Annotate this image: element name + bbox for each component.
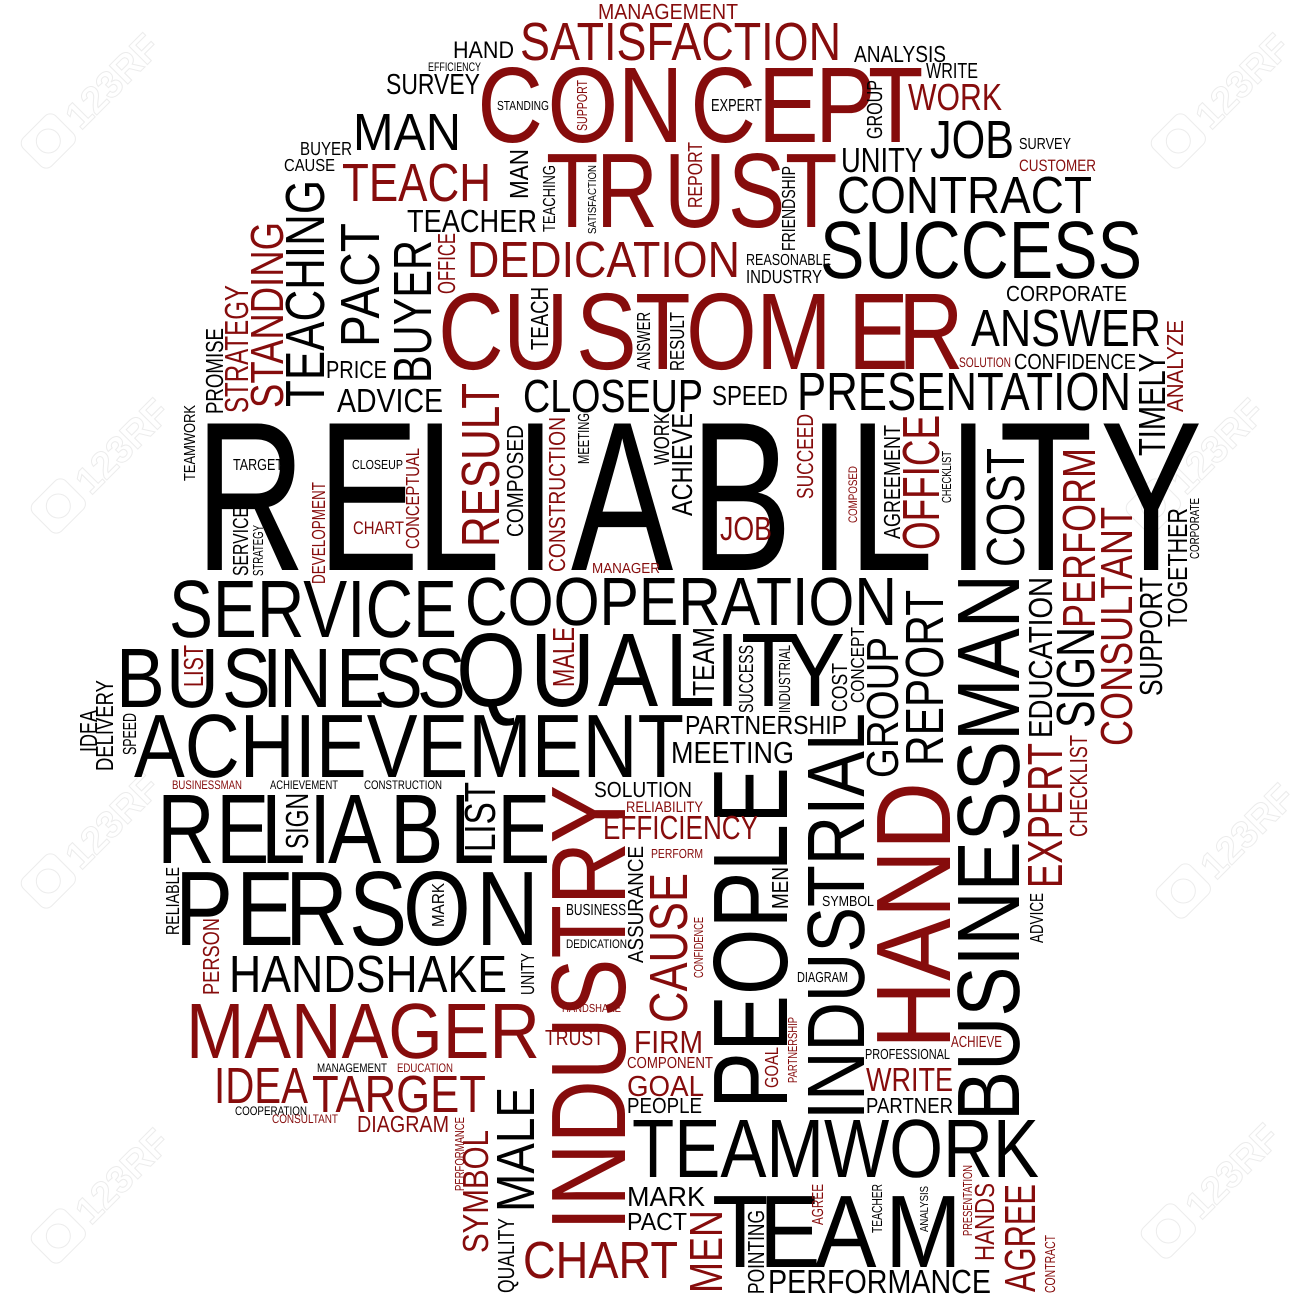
- word: ACHIEVEMENT: ACHIEVEMENT: [134, 697, 684, 797]
- word: PROMISE vertical: PROMISE: [202, 328, 229, 414]
- word: TOGETHER vertical: TOGETHER: [1162, 508, 1193, 627]
- word: INDUSTRY vertical: INDUSTRY: [530, 785, 648, 1231]
- word: EDUCATION vertical: EDUCATION: [1023, 577, 1060, 738]
- word: CONFIDENCE: CONFIDENCE: [1014, 349, 1136, 374]
- watermarks: 123RF: [58, 26, 169, 137]
- word: RELIABLE vertical small: RELIABLE: [163, 867, 184, 935]
- word: WORK: WORK: [908, 77, 1002, 119]
- word: TEAMWORK: TEAMWORK: [632, 1102, 1039, 1195]
- word: SUPPORT vertical: SUPPORT: [1133, 577, 1169, 696]
- word: MARK vertical: MARK: [428, 883, 448, 927]
- word: UNITY vertical: UNITY: [518, 953, 539, 995]
- word: ANALYSIS: ANALYSIS: [854, 41, 946, 67]
- word: PARTNERSHIP vertical small: PARTNERSHIP: [785, 1017, 800, 1083]
- word: PERSON vertical red: PERSON: [198, 918, 224, 995]
- word: PERFORM small: PERFORM: [651, 846, 703, 861]
- word: SYMBOL vertical: SYMBOL: [455, 1130, 496, 1253]
- word: IDEA: IDEA: [214, 1057, 308, 1114]
- word: SERVICE vertical small: SERVICE: [228, 507, 253, 576]
- word: OFFICE vertical small: OFFICE: [434, 233, 461, 294]
- watermarks: 123RF: [1193, 776, 1300, 887]
- word: IDEA vertical: IDEA: [76, 710, 103, 752]
- word: CLOSEUP small: CLOSEUP: [352, 457, 403, 472]
- word: REPORT vertical: REPORT: [895, 590, 955, 766]
- word: EDUCATION small: EDUCATION: [397, 1061, 453, 1075]
- word: STRATEGY vertical: STRATEGY: [219, 285, 256, 413]
- word: TEACH vertical: TEACH: [527, 287, 554, 350]
- word: MEN vertical small: MEN: [767, 867, 793, 909]
- word: EFFICIENCY: EFFICIENCY: [603, 810, 758, 847]
- word: MARK: MARK: [627, 1181, 706, 1212]
- word: WRITE: WRITE: [926, 58, 978, 83]
- word: SYMBOL small: SYMBOL: [822, 894, 874, 910]
- word: INDUSTRIAL vertical: INDUSTRIAL: [791, 713, 882, 1120]
- word: CONCEPT: CONCEPT: [477, 45, 923, 165]
- word: CLOSEUP: CLOSEUP: [523, 370, 703, 422]
- word: ADVICE: ADVICE: [337, 383, 443, 420]
- word: BUSINESSMAN vertical: BUSINESSMAN: [939, 574, 1038, 1121]
- word: SUPPORT vertical: SUPPORT: [575, 80, 591, 131]
- word: UNITY: UNITY: [841, 141, 923, 180]
- word: HANDS vertical: HANDS: [969, 1183, 1000, 1261]
- word: RESULT vertical small: RESULT: [667, 312, 689, 371]
- word: TARGET small: TARGET: [233, 457, 283, 474]
- word: PARTNERSHIP: PARTNERSHIP: [685, 710, 847, 740]
- word: CONSULTANT vertical: CONSULTANT: [1091, 507, 1142, 746]
- word: EFFICIENCY: EFFICIENCY: [428, 60, 481, 74]
- word: CAUSE: CAUSE: [284, 155, 335, 175]
- word: COMPONENT: COMPONENT: [627, 1055, 713, 1072]
- word: MEETING vertical: MEETING: [576, 413, 593, 464]
- word: BUSINESS small: BUSINESS: [566, 902, 626, 919]
- word: GOAL: GOAL: [627, 1071, 704, 1103]
- word: TIMELY vertical: TIMELY: [1132, 353, 1174, 456]
- word: AGREE vertical: AGREE: [997, 1184, 1045, 1292]
- word: SURVEY: SURVEY: [386, 69, 480, 101]
- word: TRUST small: TRUST: [545, 1025, 604, 1050]
- word: GOAL vertical small: GOAL: [762, 1047, 783, 1088]
- word: HANDSHAKE small: HANDSHAKE: [562, 1002, 621, 1015]
- word: DEDICATION: DEDICATION: [467, 231, 740, 288]
- watermarks: 123RF: [58, 766, 169, 877]
- word: DEDICATION small: DEDICATION: [566, 937, 627, 951]
- word: CORPORATE vertical small: CORPORATE: [1187, 498, 1202, 559]
- word: MEN vertical: MEN: [680, 1210, 732, 1293]
- word: CONSULTANT small: CONSULTANT: [272, 1112, 338, 1126]
- word: SOLUTION small: SOLUTION: [959, 355, 1011, 370]
- word: MAN: MAN: [353, 104, 461, 162]
- word: COST vertical small: COST: [827, 663, 852, 712]
- word: COST vertical: COST: [976, 448, 1036, 567]
- word: CONTRACT small vertical: CONTRACT: [1043, 1235, 1059, 1293]
- word: INDUSTRIAL vertical small: INDUSTRIAL: [777, 645, 794, 713]
- word: PERFORMANCE vertical small: PERFORMANCE: [452, 1117, 467, 1191]
- word: SUCCESS vertical small: SUCCESS: [736, 645, 758, 713]
- word: QUALITY vertical: QUALITY: [493, 1218, 519, 1293]
- word: CONSTRUCTION small: CONSTRUCTION: [364, 778, 442, 792]
- word: SATISFACTION vertical small: SATISFACTION: [586, 165, 599, 234]
- word: SIGN vertical: SIGN: [1046, 627, 1106, 728]
- word: CONFIDENCE vertical small: CONFIDENCE: [691, 917, 706, 978]
- word: CONSTRUCTION vertical: CONSTRUCTION: [544, 417, 570, 572]
- word: TEACHER: TEACHER: [407, 203, 537, 239]
- word: QUALITY: QUALITY: [456, 612, 845, 729]
- word: REASONABLE: REASONABLE: [746, 252, 831, 269]
- word: COOPERATION small: COOPERATION: [235, 1104, 307, 1118]
- word: EXPERT: EXPERT: [711, 95, 762, 115]
- word: SUCCEED vertical: SUCCEED: [792, 414, 818, 499]
- word: HAND vertical: HAND: [855, 782, 973, 1049]
- word: ACHIEVEMENT small: ACHIEVEMENT: [270, 778, 338, 792]
- word: DIAGRAM: DIAGRAM: [357, 1111, 449, 1137]
- word: TEAMWORK vertical small: TEAMWORK: [182, 405, 199, 481]
- word: ADVICE vertical small: ADVICE: [1027, 893, 1048, 943]
- word: GROUP vertical: GROUP: [862, 80, 887, 139]
- word: PACT vertical: PACT: [329, 223, 391, 347]
- word: TEACHER small vertical: TEACHER: [870, 1184, 886, 1233]
- word: SURVEY small: SURVEY: [1019, 136, 1071, 153]
- word: DELIVERY vertical: DELIVERY: [92, 680, 119, 771]
- word: DIAGRAM small: DIAGRAM: [797, 970, 848, 986]
- word: CORPORATE: CORPORATE: [1006, 281, 1127, 306]
- word: DEVELOPMENT vertical: DEVELOPMENT: [309, 482, 330, 584]
- word: HANDSHAKE: HANDSHAKE: [229, 946, 507, 1004]
- word: MALE vertical: MALE: [486, 1087, 546, 1212]
- word: CHECKLIST vertical small: CHECKLIST: [939, 451, 954, 503]
- word: POINTING vertical: POINTING: [743, 1210, 769, 1294]
- watermarks: 123RF: [68, 1121, 179, 1232]
- word: MANAGEMENT small: MANAGEMENT: [317, 1061, 387, 1075]
- word: PROFESSIONAL: PROFESSIONAL: [865, 1047, 950, 1063]
- word: TEACH: TEACH: [342, 153, 491, 213]
- word: MEETING: MEETING: [671, 736, 794, 770]
- word: TRUST: TRUST: [546, 132, 837, 250]
- word: ASSURANCE vertical: ASSURANCE: [623, 846, 648, 963]
- word: TEACHING small vertical: TEACHING: [539, 165, 559, 232]
- word: EXPERT vertical: EXPERT: [1018, 743, 1073, 888]
- word: INDUSTRY small: INDUSTRY: [746, 267, 822, 288]
- word: BUYER vertical: BUYER: [383, 240, 443, 383]
- word: PARTNER: PARTNER: [866, 1093, 953, 1118]
- word: MANAGER: MANAGER: [186, 987, 540, 1075]
- word: SPEED vertical: SPEED: [120, 713, 141, 755]
- word: ANSWER: ANSWER: [971, 300, 1161, 358]
- word: COMPOSED vertical small: COMPOSED: [846, 466, 860, 523]
- watermarks: 123RF: [1178, 1116, 1289, 1227]
- word: TARGET: TARGET: [312, 1066, 486, 1124]
- word: COOPERATION: COOPERATION: [465, 564, 897, 640]
- word: MANAGER small: MANAGER: [592, 561, 660, 577]
- word: BUSINESS: BUSINESS: [116, 631, 466, 725]
- word: TEAM: TEAM: [712, 1174, 962, 1289]
- word: WRITE: WRITE: [866, 1062, 953, 1099]
- word: JOB small: JOB: [720, 511, 772, 548]
- word: BUYER: BUYER: [300, 139, 352, 160]
- word: RELIABILITY small: RELIABILITY: [626, 799, 703, 816]
- word: TEAM vertical: TEAM: [687, 627, 721, 696]
- word: SIGN vertical: SIGN: [279, 793, 315, 849]
- word: ANSWER vertical small: ANSWER: [634, 312, 655, 370]
- word: REPORT vertical: REPORT: [685, 142, 707, 208]
- word: MALE vertical red: MALE: [547, 627, 581, 687]
- watermarks: 123RF: [1163, 391, 1274, 502]
- word: AGREEMENT vertical: AGREEMENT: [879, 425, 905, 539]
- word: LIST vertical: LIST: [457, 782, 505, 852]
- word: SATISFACTION: SATISFACTION: [520, 12, 841, 72]
- word: FRIENDSHIP vertical: FRIENDSHIP: [779, 166, 800, 251]
- watermarks: 123RF: [1188, 26, 1299, 137]
- word: SOLUTION: SOLUTION: [594, 777, 692, 802]
- word: ANALYZE vertical: ANALYZE: [1162, 320, 1188, 412]
- word: RELIABLE: RELIABLE: [157, 774, 550, 884]
- word: RESULT vertical: RESULT: [451, 383, 511, 547]
- word: ANALYSIS small vertical: ANALYSIS: [918, 1186, 931, 1232]
- watermarks: 123RF: [68, 391, 179, 502]
- word: PACT: PACT: [627, 1209, 687, 1236]
- word: CHART: CHART: [523, 1232, 678, 1290]
- word: CONCEPT vertical small: CONCEPT: [848, 627, 869, 703]
- word: ACHIEVE small: ACHIEVE: [951, 1034, 1002, 1051]
- word: WORK vertical: WORK: [649, 413, 674, 465]
- word: RELIABILITY main title: RELIABILITY: [195, 378, 1202, 616]
- word: COMPOSED vertical: COMPOSED: [502, 425, 528, 537]
- word: CUSTOMER: CUSTOMER: [438, 271, 964, 393]
- word: STANDING vertical: STANDING: [241, 222, 293, 408]
- word: PEOPLE small: PEOPLE: [627, 1093, 702, 1118]
- word: CHART small: CHART: [353, 518, 404, 538]
- word: FIRM: FIRM: [634, 1024, 703, 1060]
- word: PRICE: PRICE: [326, 357, 387, 384]
- word: ACHIEVE vertical: ACHIEVE: [667, 413, 699, 516]
- word: TEACHING vertical: TEACHING: [274, 180, 336, 407]
- word: STRATEGY vertical small: STRATEGY: [251, 525, 267, 576]
- word: GROUP vertical: GROUP: [857, 637, 908, 778]
- word: HAND: HAND: [453, 37, 514, 64]
- word: PERSON: PERSON: [175, 850, 539, 968]
- word: AGREE small vertical: AGREE: [810, 1184, 827, 1225]
- word: SERVICE: SERVICE: [169, 564, 457, 655]
- word: SPEED: SPEED: [712, 380, 788, 411]
- word: SUCCESS: SUCCESS: [820, 205, 1142, 296]
- word: PERFORM vertical: PERFORM: [1053, 448, 1105, 628]
- word: CONCEPTUAL vertical: CONCEPTUAL: [403, 448, 424, 549]
- word: CUSTOMER small: CUSTOMER: [1019, 157, 1096, 175]
- word: LIST vertical red: LIST: [178, 645, 209, 687]
- word: PRESENTATION small vertical: PRESENTATION: [960, 1165, 975, 1236]
- word: BUSINESSMAN small: BUSINESSMAN: [172, 778, 242, 792]
- word: CONTRACT: CONTRACT: [837, 167, 1092, 225]
- word: MAN vertical: MAN: [504, 149, 534, 199]
- word: CAUSE vertical: CAUSE: [639, 873, 699, 1023]
- word: OFFICE vertical: OFFICE: [893, 415, 951, 550]
- word: STANDING: STANDING: [497, 98, 549, 113]
- word: PEOPLE vertical: PEOPLE: [692, 767, 810, 1109]
- word: JOB: JOB: [930, 110, 1014, 170]
- word: PRESENTATION: PRESENTATION: [797, 362, 1131, 422]
- word: PERFORMANCE: PERFORMANCE: [768, 1264, 991, 1300]
- word: CHECKLIST vertical: CHECKLIST: [1066, 735, 1093, 837]
